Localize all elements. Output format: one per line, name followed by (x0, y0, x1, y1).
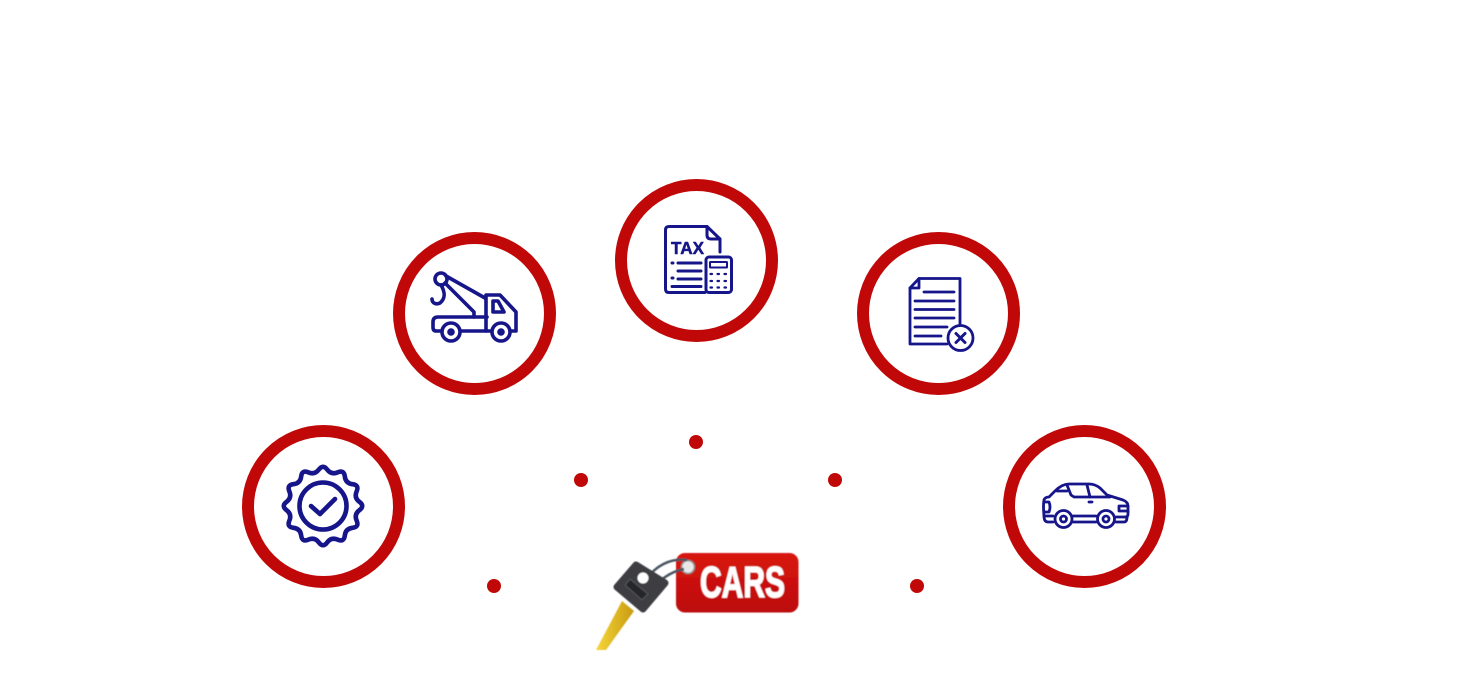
connector dot 1 (487, 579, 501, 593)
connector dot 3 (689, 435, 703, 449)
ring: tax (621, 185, 772, 336)
connector dot 5 (910, 579, 924, 593)
logo: car key with CARS tag (596, 553, 798, 650)
icon: cancelled document (910, 278, 973, 350)
connector dot 4 (828, 473, 842, 487)
ring: car (1009, 431, 1160, 582)
key blade (596, 601, 634, 650)
icon: tow truck (432, 273, 516, 341)
label: TAX: TAX (671, 238, 704, 258)
key hole (638, 572, 648, 584)
icon: tax document and calculator (666, 226, 732, 292)
ring: certified badge (248, 431, 399, 582)
tag eyelet (682, 560, 694, 574)
icon: certified badge (284, 467, 362, 545)
key ring (646, 560, 687, 586)
ring: cancelled document (863, 238, 1014, 389)
ring: tow truck (399, 238, 550, 389)
connector dot 2 (574, 473, 588, 487)
key head (617, 565, 665, 609)
red tag (676, 553, 798, 612)
tag label: CARS (700, 558, 785, 607)
icon: car (1044, 484, 1128, 528)
